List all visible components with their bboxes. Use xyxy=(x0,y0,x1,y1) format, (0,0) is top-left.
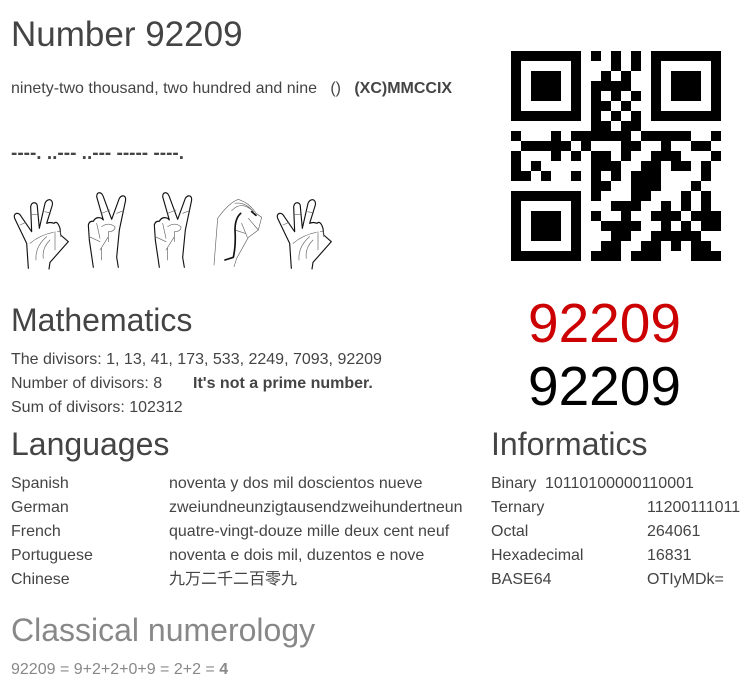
icon: hand sign nine (second) xyxy=(277,200,331,269)
languages table: zweiundneunzigtausendzweihundertneun xyxy=(169,499,463,516)
QR code xyxy=(511,51,721,261)
informatics table: Hexadecimal xyxy=(491,547,583,564)
languages table: French xyxy=(11,523,61,540)
languages table: 九万二千二百零九 xyxy=(169,571,297,588)
languages table: noventa e dois mil, duzentos e nove xyxy=(169,547,424,564)
languages table xyxy=(11,475,463,588)
heading: informatics: Informatics xyxy=(491,426,647,462)
big black number: 92209 xyxy=(528,355,681,417)
informatics table: Ternary xyxy=(491,499,544,516)
heading: mathematics: Mathematics xyxy=(11,302,192,338)
informatics table: OTIyMDk= xyxy=(647,571,724,588)
title: Number 92209 xyxy=(11,15,243,54)
informatics table: 11200111011 xyxy=(647,499,740,516)
icon: hand sign zero xyxy=(214,199,262,267)
informatics table: 16831 xyxy=(647,547,692,564)
languages table: German xyxy=(11,499,69,516)
informatics table: BASE64 xyxy=(491,571,551,588)
sum of divisors: Sum of divisors: 102312 xyxy=(11,399,183,416)
icon: hand sign nine xyxy=(14,200,68,269)
number of divisors: Number of divisors: 8 xyxy=(11,375,162,392)
heading: classical numerology: Classical numerology xyxy=(11,612,315,648)
heading: languages: Languages xyxy=(11,426,169,462)
informatics table: 10110100000110001 xyxy=(545,475,694,492)
icon: hand sign two (second) xyxy=(154,193,192,267)
icon: hand sign two xyxy=(88,193,126,267)
number in words and roman numeral: ninety-two thousand, two hundred and nine () (XC)MMCCIX xyxy=(11,80,452,97)
morse code: ----. ..--- ..--- ----- ----. xyxy=(11,143,184,164)
sign language hands xyxy=(14,192,332,270)
numerology calculation: 92209 = 9+2+2+0+9 = 2+2 = 4 xyxy=(11,661,228,678)
divisors list: The divisors: 1, 13, 41, 173, 533, 2249, 7093, 92209 xyxy=(11,351,382,368)
informatics table xyxy=(491,475,740,588)
informatics table: Binary xyxy=(491,475,536,492)
big red number: 92209 xyxy=(528,292,681,354)
languages table: quatre-vingt-douze mille deux cent neuf xyxy=(169,523,449,540)
informatics table: Octal xyxy=(491,523,528,540)
languages table: Portuguese xyxy=(11,547,93,564)
informatics table: 264061 xyxy=(647,523,700,540)
languages table: Spanish xyxy=(11,475,69,492)
prime statement: It's not a prime number. xyxy=(193,375,373,392)
languages table: noventa y dos mil doscientos nueve xyxy=(169,475,422,492)
languages table: Chinese xyxy=(11,571,70,588)
